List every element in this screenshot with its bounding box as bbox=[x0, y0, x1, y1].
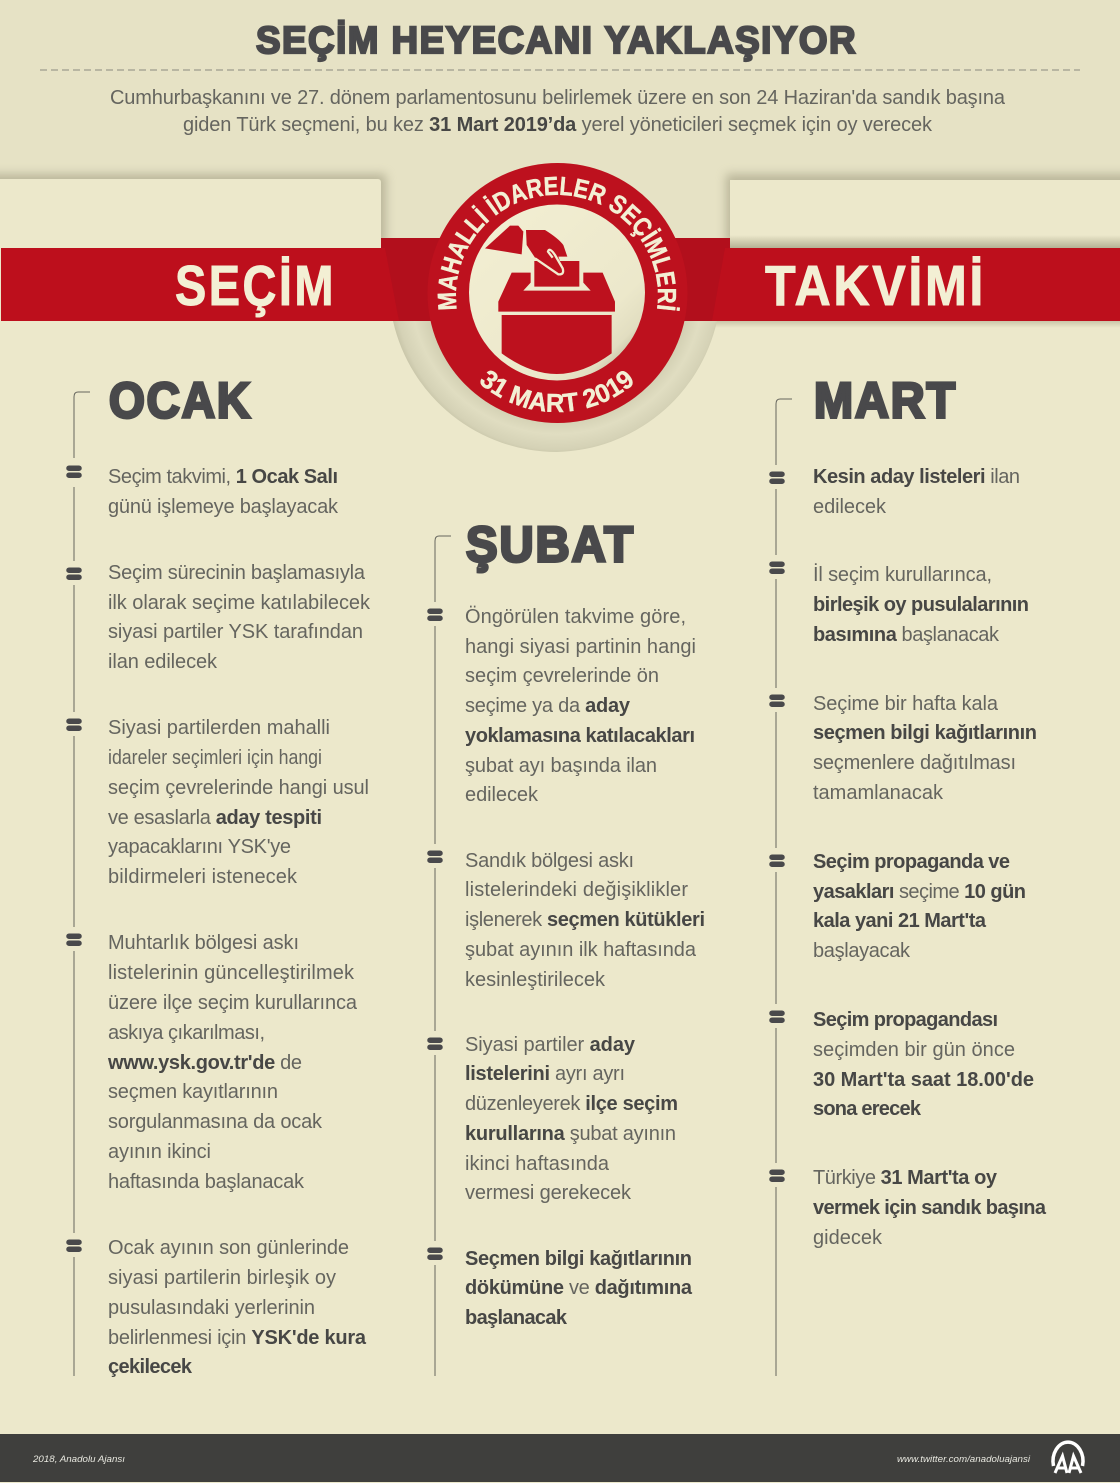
item 3: bildirmeleri istenecek bbox=[108, 866, 298, 888]
item 1 bbox=[772, 466, 1020, 518]
ribbon label left: SEÇİM bbox=[175, 254, 336, 318]
panel: left tab bbox=[0, 179, 381, 259]
item 4: başlayacak bbox=[813, 940, 911, 962]
item 2: birleşik oy pusulalarının bbox=[813, 594, 1029, 616]
item 5: çekilecek bbox=[108, 1356, 193, 1378]
item 4: Seçim propaganda ve bbox=[813, 851, 1010, 873]
timeline subat bbox=[435, 536, 451, 1376]
footer bbox=[0, 1434, 1120, 1482]
item 3: kurullarına şubat ayının bbox=[465, 1123, 676, 1145]
item 2 bbox=[69, 562, 371, 673]
item 4 bbox=[772, 851, 1026, 962]
intro text bbox=[110, 87, 1006, 136]
item 4: Seçmen bilgi kağıtlarının bbox=[465, 1248, 692, 1270]
item 2: işlenerek seçmen kütükleri bbox=[465, 909, 705, 931]
item 2: Seçim sürecinin başlamasıyla bbox=[108, 562, 366, 584]
item 1: edilecek bbox=[813, 496, 887, 518]
item 5: Ocak ayının son günlerinde bbox=[108, 1237, 349, 1259]
item 6: vermek için sandık başına bbox=[813, 1197, 1047, 1219]
item 3: yapacaklarını YSK'ye bbox=[108, 836, 291, 858]
item 5: 30 Mart'ta saat 18.00'de bbox=[813, 1069, 1034, 1091]
ribbon label right: TAKVİMİ bbox=[765, 254, 986, 318]
item 4: www.ysk.gov.tr'de de bbox=[107, 1052, 302, 1074]
item 3: düzenleyerek ilçe seçim bbox=[465, 1093, 678, 1115]
item 5: siyasi partilerin birleşik oy bbox=[108, 1267, 336, 1289]
dark centre ribbon bbox=[381, 238, 730, 321]
item 3 bbox=[430, 1034, 678, 1204]
seal top text: MAHALLİ İDARELER SEÇİMLERİ bbox=[438, 176, 680, 311]
item 5: seçimden bir gün önce bbox=[813, 1039, 1015, 1061]
item 4: Muhtarlık bölgesi askı bbox=[108, 932, 299, 954]
item 1 bbox=[69, 466, 339, 518]
item 3: seçmenlere dağıtılması bbox=[813, 752, 1016, 774]
item 1: seçim çevrelerinde ön bbox=[465, 665, 659, 687]
shield behind the seal bbox=[393, 321, 717, 452]
item 3: seçmen bilgi kağıtlarının bbox=[813, 722, 1037, 744]
footer link: www.twitter.com/anadoluajansi bbox=[897, 1454, 1031, 1464]
item 1: Öngörülen takvime göre, bbox=[465, 606, 686, 628]
item 3: ikinci haftasında bbox=[465, 1153, 610, 1175]
ribbon: left bbox=[1, 248, 399, 321]
item 2: ilan edilecek bbox=[108, 651, 218, 673]
icon: AA logo bbox=[1053, 1442, 1083, 1473]
item 2: listelerindeki değişiklikler bbox=[465, 879, 688, 901]
item 5 bbox=[69, 1237, 367, 1378]
item 3: ve esaslarla aday tespiti bbox=[108, 807, 322, 829]
item 1: seçime ya da aday bbox=[465, 695, 631, 717]
item 2: İl seçim kurullarınca, bbox=[813, 563, 992, 586]
item 2 bbox=[430, 850, 705, 991]
item 3: vermesi gerekecek bbox=[465, 1182, 632, 1204]
item 6: gidecek bbox=[813, 1227, 883, 1249]
item 3: tamamlanacak bbox=[813, 782, 944, 804]
item 4: üzere ilçe seçim kurullarınca bbox=[108, 992, 358, 1014]
item 3: idareler seçimleri için hangi bbox=[108, 747, 322, 769]
item 4: askıya çıkarılması, bbox=[108, 1022, 265, 1044]
item 4 bbox=[430, 1248, 693, 1329]
panel: right tab bbox=[730, 180, 1120, 260]
item 3: Seçime bir hafta kala bbox=[813, 693, 999, 715]
item 1: Kesin aday listeleri ilan bbox=[813, 466, 1020, 488]
item 2: ilk olarak seçime katılabilecek bbox=[108, 592, 371, 614]
heading ocak: OCAK bbox=[109, 372, 252, 428]
item 4 bbox=[69, 932, 358, 1193]
item 4: haftasında başlanacak bbox=[108, 1171, 305, 1193]
item 3: seçim çevrelerinde hangi usul bbox=[108, 777, 369, 799]
heading mart: MART bbox=[814, 372, 957, 428]
item 4: kala yani 21 Mart'ta bbox=[813, 910, 987, 932]
item 1 bbox=[430, 606, 696, 806]
item 5: belirlenmesi için YSK'de kura bbox=[108, 1327, 367, 1349]
seal: mahalli idareler bbox=[428, 163, 688, 423]
item 2: siyasi partiler YSK tarafından bbox=[108, 621, 363, 643]
seal bottom text: 31 MART 2019 bbox=[480, 370, 633, 412]
item 4: seçmen kayıtlarının bbox=[108, 1081, 278, 1103]
item 3: listelerini ayrı ayrı bbox=[465, 1063, 625, 1085]
intro text: giden Türk seçmeni, bu kez 31 Mart 2019’da yerel yöneticileri seçmek için oy verecek bbox=[183, 114, 933, 136]
intro text: Cumhurbaşkanını ve 27. dönem parlamentosunu belirlemek üzere en son 24 Haziran'da sandık başına bbox=[110, 87, 1006, 109]
footer credit: 2018, Anadolu Ajansı bbox=[32, 1454, 126, 1464]
item 2 bbox=[772, 563, 1029, 646]
header band background bbox=[0, 0, 1120, 240]
item 5: pusulasındaki yerlerinin bbox=[108, 1297, 315, 1319]
item 3 bbox=[69, 717, 369, 888]
item 1: yoklamasına katılacakları bbox=[465, 725, 695, 747]
item 5: Seçim propagandası bbox=[813, 1009, 998, 1031]
item 2: kesinleştirilecek bbox=[465, 969, 606, 991]
item 2: Sandık bölgesi askı bbox=[465, 850, 634, 872]
ribbon: right bbox=[712, 248, 1120, 321]
item 3: Siyasi partilerden mahalli bbox=[108, 717, 330, 739]
item 2: şubat ayının ilk haftasında bbox=[465, 939, 697, 961]
item 6: Türkiye 31 Mart'ta oy bbox=[813, 1167, 998, 1189]
panel: ocak bbox=[69, 372, 371, 1378]
item 1: şubat ayı başında ilan bbox=[465, 755, 657, 777]
item 4: sorgulanmasına da ocak bbox=[108, 1111, 323, 1133]
item 3: Siyasi partiler aday bbox=[465, 1034, 636, 1056]
item 4: yasakları seçime 10 gün bbox=[813, 881, 1026, 903]
item 2: basımına başlanacak bbox=[813, 624, 1000, 646]
panel: subat bbox=[430, 516, 705, 1376]
item 4: listelerinin güncelleştirilmek bbox=[108, 962, 355, 984]
item 4: dökümüne ve dağıtımına bbox=[465, 1277, 693, 1299]
timeline mart bbox=[776, 399, 792, 1376]
item 1: günü işlemeye başlayacak bbox=[108, 496, 339, 518]
timeline ocak bbox=[74, 392, 90, 1376]
item 1: edilecek bbox=[465, 784, 539, 806]
seal inner circle bbox=[469, 204, 645, 380]
icon: ballot box bbox=[498, 273, 615, 374]
heading subat: ŞUBAT bbox=[466, 516, 635, 572]
item 4: başlanacak bbox=[465, 1307, 568, 1329]
item 1: hangi siyasi partinin hangi bbox=[465, 636, 696, 658]
item 5: sona erecek bbox=[813, 1098, 922, 1120]
panel: mart bbox=[772, 372, 1047, 1376]
item 1: Seçim takvimi, 1 Ocak Salı bbox=[108, 466, 338, 488]
icon: hand with ballot bbox=[485, 226, 579, 287]
item 4: ayının ikinci bbox=[108, 1141, 211, 1163]
title: SEÇİM HEYECANI YAKLAŞIYOR bbox=[256, 20, 857, 62]
item 3 bbox=[772, 693, 1037, 804]
item 5 bbox=[772, 1009, 1034, 1120]
item 6 bbox=[772, 1167, 1047, 1249]
